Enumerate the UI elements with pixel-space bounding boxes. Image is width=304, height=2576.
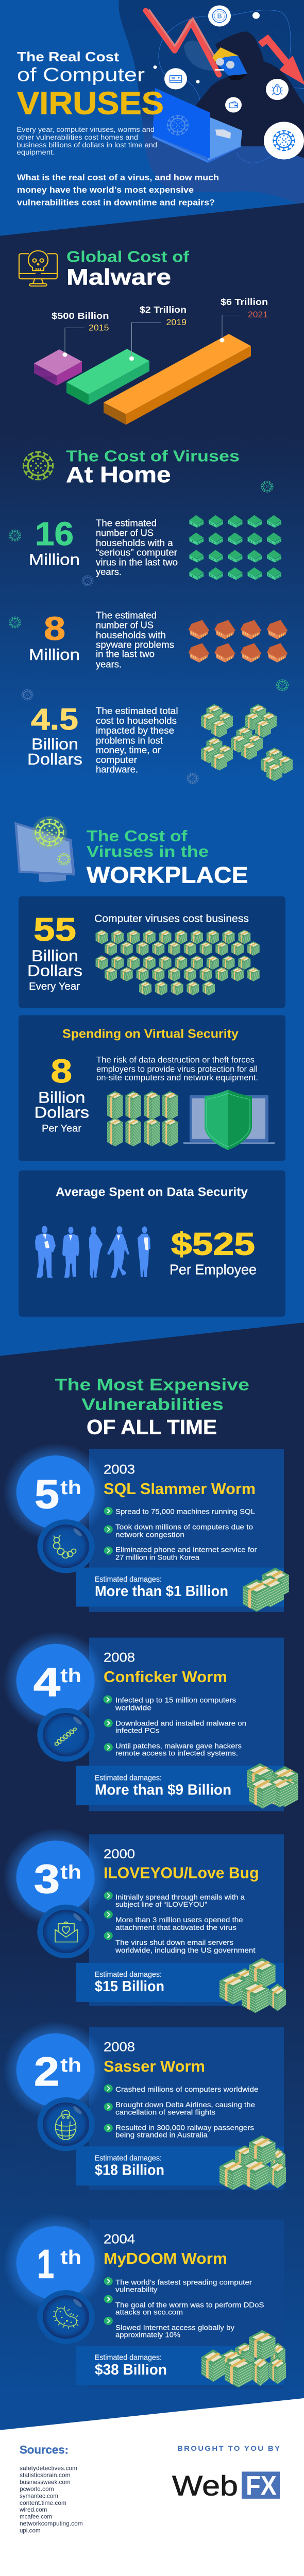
year and name bbox=[104, 2039, 205, 2075]
year and name: MyDOOM Worm bbox=[104, 2249, 227, 2267]
leader lines bbox=[65, 315, 242, 359]
rank badge: th bbox=[60, 2054, 81, 2076]
damages: Estimated damages: bbox=[95, 1970, 162, 1979]
damages band bbox=[76, 2346, 284, 2385]
title: of Computer bbox=[17, 64, 145, 86]
icon: virus badge bbox=[264, 122, 304, 160]
icon: bitcoin: B bbox=[217, 12, 222, 20]
sources list: content.time.com bbox=[20, 2499, 66, 2506]
rank badge: 3 bbox=[34, 1856, 60, 1902]
rank badge bbox=[3, 1443, 108, 1541]
damages bbox=[95, 1774, 231, 1798]
icon: green virus bbox=[24, 452, 53, 480]
year and name: 2004 bbox=[104, 2231, 135, 2247]
year and name bbox=[104, 1462, 256, 1498]
title: The Real Cost bbox=[17, 49, 119, 64]
damages bbox=[95, 2353, 167, 2378]
damages: $38 Billion bbox=[95, 2362, 167, 2378]
year and name: 2003 bbox=[104, 1462, 135, 1477]
label: 2019: $2 Trillion bbox=[140, 304, 187, 315]
damages: More than $1 Billion bbox=[95, 1583, 228, 1600]
title bbox=[17, 49, 164, 121]
text: 16 million description: years. bbox=[96, 567, 122, 578]
rank badge bbox=[3, 1828, 108, 1926]
logo: WebFX: FX bbox=[246, 2470, 277, 2501]
heading: most expensive vulnerabilities bbox=[55, 1375, 249, 1438]
sources list: networkcomputing.com bbox=[20, 2520, 83, 2527]
text: 16 million description: households with a bbox=[96, 538, 173, 549]
stat: 8 billion: Billion bbox=[38, 1088, 86, 1106]
text: 4.5 billion description: computer bbox=[96, 755, 137, 766]
bullets: 27 million in South Korea bbox=[115, 1554, 200, 1562]
text: risk description: on-site computers and network equipment. bbox=[96, 1073, 258, 1082]
bullets: attacks on sco.com bbox=[115, 2309, 183, 2316]
heading: most expensive vulnerabilities: Vulnerabilities bbox=[81, 1395, 224, 1414]
stat: 8 million: 8 bbox=[44, 610, 65, 647]
stat: 8 billion: 8 bbox=[51, 1053, 72, 1089]
hero illustration: hacker at laptop bbox=[146, 5, 304, 163]
intro question: vulnerabilities cost in downtime and repairs? bbox=[17, 197, 215, 207]
damages band bbox=[76, 2146, 284, 2185]
intro paragraph: Every year, computer viruses, worms and bbox=[16, 125, 155, 133]
label: 2021 bbox=[221, 296, 268, 319]
panel: average spent on data security bbox=[19, 1171, 285, 1317]
icon: worm bbox=[37, 1708, 95, 1761]
leader dots bbox=[63, 338, 225, 361]
stat: $525 per employee: $525 bbox=[171, 1227, 255, 1262]
sources list: safetydetectives.com bbox=[20, 2465, 77, 2471]
damages band bbox=[76, 1963, 284, 2002]
bullets: Eliminated phone and internet service for bbox=[115, 1546, 257, 1554]
stat: 16 million: 16 bbox=[35, 515, 74, 552]
stat: 55 billion: Billion bbox=[31, 946, 78, 964]
text: 16 million description: “serious” computer bbox=[96, 548, 177, 558]
decorative viruses bbox=[9, 481, 288, 784]
text: 4.5 billion description: The estimated total bbox=[96, 706, 178, 717]
sources bbox=[19, 2443, 83, 2534]
bullets: The virus shut down email servers bbox=[115, 1939, 233, 1947]
stat: 4.5 billion dollars bbox=[27, 703, 82, 768]
label: 2015: 2015 bbox=[89, 323, 109, 332]
damages bbox=[95, 1970, 164, 1995]
icon: money pile bbox=[247, 1763, 298, 1809]
bullets: Until patches, malware gave hackers bbox=[115, 1742, 242, 1750]
dark background upper bbox=[0, 203, 304, 1356]
intro paragraph: equipment. bbox=[16, 148, 55, 156]
card panel bbox=[89, 2219, 284, 2388]
rank badge: th bbox=[60, 1665, 81, 1687]
intro paragraph: business billions of dollars in lost time and bbox=[16, 141, 157, 149]
label: 2021: 2021 bbox=[248, 310, 268, 319]
card: 3rd ILOVEYOU bbox=[3, 1828, 286, 2013]
text: 8 million description: in the last two bbox=[96, 649, 155, 659]
damages band bbox=[76, 1568, 284, 1607]
stat: 8 million: Million bbox=[29, 646, 80, 664]
damages bbox=[95, 2154, 164, 2178]
stat: 8 million bbox=[29, 610, 80, 664]
title: VIRUSES bbox=[17, 85, 164, 121]
dots bbox=[154, 12, 260, 83]
text: 4.5 billion description: problems in lost bbox=[96, 736, 163, 746]
sources list: businessweek.com bbox=[20, 2479, 71, 2485]
bullets: vulnerability bbox=[115, 2286, 158, 2294]
text: 4.5 billion description bbox=[96, 706, 178, 775]
rank badge bbox=[3, 1631, 108, 1730]
bar: 2019 green bbox=[66, 349, 149, 405]
caption: Computer viruses cost business bbox=[94, 912, 249, 924]
card panel bbox=[89, 1834, 284, 2006]
bullets: Brought down Delta Airlines, causing the bbox=[115, 2102, 255, 2109]
bullets: The world’s fastest spreading computer bbox=[115, 2279, 252, 2286]
bullets: cancellation of several flights bbox=[115, 2109, 215, 2116]
heading: global cost of malware: Malware bbox=[66, 265, 171, 290]
bullets: attachment that activated the virus bbox=[115, 1924, 237, 1932]
text: 4.5 billion description: impacted by these bbox=[96, 726, 174, 736]
stat: 8 billion bbox=[34, 1053, 89, 1134]
text: 8 million description: The estimated bbox=[96, 611, 157, 621]
bullets: Took down millions of computers due to bbox=[115, 1523, 253, 1531]
stat: 8 billion: Dollars bbox=[34, 1103, 89, 1121]
sources list: upi.com bbox=[20, 2527, 41, 2534]
stat: 55 billion bbox=[27, 911, 82, 992]
label: 2015: $500 Billion bbox=[52, 311, 109, 321]
stat: 55 billion: Dollars bbox=[27, 962, 82, 979]
icon: money pile bbox=[201, 2330, 286, 2387]
sources list: statisticsbrain.com bbox=[20, 2471, 71, 2479]
sources heading: Sources: bbox=[20, 2443, 69, 2456]
bullets bbox=[103, 1696, 246, 1757]
card: 4th Conficker Worm bbox=[3, 1631, 298, 1811]
intro question bbox=[17, 172, 219, 207]
face bbox=[212, 47, 247, 80]
stat: 4.5 billion dollars: 4.5 bbox=[31, 703, 78, 736]
stat: 4.5 billion dollars: Billion bbox=[31, 735, 78, 753]
icon: infected monitor bbox=[14, 816, 75, 883]
icon: worm bbox=[37, 1519, 95, 1573]
icon: wallet bbox=[225, 97, 242, 113]
rank badge: 2 bbox=[34, 2049, 59, 2094]
stat: 16 million: Million bbox=[29, 550, 80, 568]
bullets: Slowed Internet access globally by bbox=[115, 2324, 235, 2332]
text: 16 million description: number of US bbox=[96, 528, 154, 538]
label: 2015 bbox=[52, 311, 109, 332]
label: 2021: $6 Trillion bbox=[221, 296, 268, 307]
label: 2019 bbox=[140, 304, 187, 327]
icon: credit card bbox=[164, 68, 187, 90]
bar: 2015 purple bbox=[34, 349, 82, 385]
heading: cost of viruses in the workplace: The Cost of bbox=[87, 827, 188, 845]
year and name: 2000 bbox=[104, 1846, 135, 1861]
icon: armored bug bbox=[37, 2097, 95, 2151]
icons: employee silhouettes bbox=[35, 1226, 150, 1278]
panel: spending on virtual security bbox=[19, 1015, 285, 1161]
arrow: falling chart right part bbox=[260, 39, 304, 84]
damages band bbox=[76, 1766, 284, 1805]
heading: global cost of malware: Global Cost of bbox=[66, 247, 189, 265]
year and name bbox=[104, 2231, 227, 2267]
icon: money pile bbox=[219, 1958, 286, 2013]
rank badge bbox=[3, 2214, 108, 2312]
bullets: Downloaded and installed malware on bbox=[115, 1720, 246, 1727]
text: 8 million description: number of US bbox=[96, 620, 154, 631]
heading: cost of viruses at home bbox=[66, 447, 240, 487]
sources list: mcafee.com bbox=[20, 2513, 52, 2520]
bullets: Initnially spread through emails with a bbox=[115, 1893, 245, 1902]
bullets: being stranded in Australia bbox=[115, 2131, 208, 2139]
icon: skull monitor bbox=[19, 251, 57, 286]
dark background lower bbox=[0, 1323, 304, 2430]
text: 4.5 billion description: money, time, or bbox=[96, 745, 161, 756]
card: 2nd Sasser Worm bbox=[3, 2021, 286, 2191]
text: 8 million description bbox=[96, 611, 174, 670]
icon: bacteria bbox=[37, 2290, 95, 2344]
card panel bbox=[89, 2027, 284, 2190]
bullets: More than 3 million users opened the bbox=[115, 1916, 243, 1924]
credit: brought to you by: BROUGHT TO YOU BY bbox=[177, 2445, 280, 2453]
arrow: falling chart left part bbox=[146, 10, 219, 75]
connector lines bbox=[159, 10, 304, 163]
rank badge: 4 bbox=[33, 1659, 60, 1705]
bullets: approximately 10% bbox=[115, 2331, 180, 2340]
stat: 4.5 billion dollars: Dollars bbox=[27, 750, 82, 768]
stat: $525 per employee: Per Employee bbox=[170, 1262, 257, 1278]
rank badge: th bbox=[60, 1477, 81, 1499]
heading: global cost of malware bbox=[66, 247, 189, 290]
heading: cost of viruses at home: At Home bbox=[66, 463, 171, 487]
text: risk description: The risk of data destruction or theft forces bbox=[96, 1055, 255, 1064]
icons: green houses grid bbox=[189, 515, 281, 580]
text: 8 million description: years. bbox=[96, 659, 122, 670]
white footer background bbox=[0, 2398, 304, 2576]
stat: 55 billion: Every Year bbox=[29, 980, 80, 992]
icons: 55 money stacks bbox=[96, 930, 260, 995]
bullets: The goal of the worm was to perform DDoS bbox=[115, 2301, 264, 2309]
bullets: worldwide, including the US government bbox=[115, 1946, 256, 1955]
text: 16 million description: The estimated bbox=[96, 518, 157, 529]
year and name: 2008 bbox=[104, 2039, 135, 2054]
year and name bbox=[104, 1650, 227, 1686]
icon: bitcoin bbox=[208, 5, 231, 27]
hand bbox=[215, 129, 231, 139]
rank badge: 5 bbox=[35, 1472, 59, 1517]
stat: 55 billion: 55 bbox=[33, 911, 76, 948]
stat: 8 billion: Per Year bbox=[42, 1123, 81, 1134]
sources list: symantec.com bbox=[20, 2493, 58, 2499]
card panel bbox=[89, 1638, 284, 1811]
card: 5th SQL Slammer Worm bbox=[3, 1443, 289, 1612]
bullets: remote access to infected systems. bbox=[115, 1750, 238, 1757]
heading: cost of viruses at home: The Cost of Viruses bbox=[66, 447, 240, 465]
sources list: wired.com bbox=[19, 2506, 47, 2513]
bullets bbox=[104, 1891, 256, 1955]
label: 2019: 2019 bbox=[166, 317, 187, 327]
heading: most expensive vulnerabilities: The Most Expensive bbox=[55, 1375, 249, 1394]
year and name: Sasser Worm bbox=[104, 2057, 205, 2075]
damages: Estimated damages: bbox=[95, 1575, 162, 1584]
bullets bbox=[104, 2084, 259, 2139]
sources list bbox=[19, 2465, 83, 2534]
heading: Spending on Virtual Security bbox=[62, 1027, 239, 1041]
bullets bbox=[104, 2277, 264, 2340]
icons: tall money stacks bbox=[107, 1091, 178, 1146]
damages: Estimated damages: bbox=[95, 1774, 162, 1782]
heading: most expensive vulnerabilities: OF ALL TIME bbox=[87, 1416, 217, 1438]
icon: money pile bbox=[243, 1568, 289, 1612]
text: 8 million description: households with bbox=[96, 631, 166, 641]
bar: 2021 orange bbox=[104, 334, 251, 425]
sources list: pcworld.com bbox=[20, 2485, 54, 2493]
bullets: network congestion bbox=[115, 1531, 184, 1539]
hooded figure bbox=[196, 31, 304, 158]
stat: $525 per employee bbox=[170, 1227, 257, 1278]
damages: $15 Billion bbox=[95, 1978, 164, 1995]
text: risk description bbox=[96, 1055, 258, 1082]
bullets: subject line of “ILOVEYOU” bbox=[115, 1901, 207, 1909]
stat: 16 million bbox=[29, 515, 80, 568]
icon: laptop with shield bbox=[183, 1090, 275, 1150]
text: 4.5 billion description: cost to households bbox=[96, 716, 177, 726]
year and name: ILOVEYOU/Love Bug bbox=[104, 1864, 259, 1882]
bullets: worldwide bbox=[115, 1704, 151, 1712]
damages: Estimated damages: bbox=[95, 2353, 162, 2362]
panel: 55 billion dollars bbox=[19, 896, 285, 1008]
icon: bug bbox=[266, 79, 289, 100]
intro question: money have the world’s most expensive bbox=[17, 185, 194, 195]
damages: $18 Billion bbox=[95, 2162, 164, 2178]
bullets: Spread to 75,000 machines running SQL bbox=[115, 1508, 255, 1516]
year and name: 2008 bbox=[104, 1650, 135, 1665]
intro paragraph bbox=[16, 125, 157, 156]
bullets: Resulted in 300,000 railway passengers bbox=[115, 2124, 254, 2132]
text: 16 million description: virus in the last two bbox=[96, 557, 178, 568]
bullets: Infected up to 15 million computers bbox=[115, 1697, 236, 1704]
rank badge bbox=[3, 2021, 108, 2120]
damages: More than $9 Billion bbox=[95, 1782, 231, 1798]
card: 1st MyDOOM Worm bbox=[3, 2214, 286, 2388]
icons: orange houses grid bbox=[189, 620, 288, 663]
rank badge: th bbox=[60, 2246, 81, 2268]
damages bbox=[95, 1575, 228, 1600]
icons: money groups bbox=[201, 704, 293, 781]
smoke bbox=[184, 40, 216, 71]
bullets: infected PCs bbox=[115, 1727, 159, 1735]
card panel bbox=[89, 1449, 284, 1612]
icon: money pile bbox=[219, 2136, 286, 2191]
bullets: Crashed millions of computers worldwide bbox=[115, 2086, 259, 2094]
logo: WebFX: Web bbox=[172, 2470, 238, 2501]
damages: Estimated damages: bbox=[95, 2154, 162, 2162]
text: 8 million description: spyware problems bbox=[96, 640, 174, 651]
bullets bbox=[104, 1507, 257, 1562]
intro question: What is the real cost of a virus, and how much bbox=[17, 172, 219, 182]
text: 4.5 billion description: hardware. bbox=[96, 765, 138, 775]
rank badge: th bbox=[60, 1861, 81, 1883]
heading: cost of viruses in the workplace bbox=[87, 827, 248, 888]
chart: malware cost bars bbox=[34, 296, 268, 425]
heading: Average Spent on Data Security bbox=[56, 1185, 248, 1199]
rank badge: 1 bbox=[37, 2242, 54, 2287]
heading: cost of viruses in the workplace: WORKPLACE bbox=[87, 862, 248, 888]
text: risk description: employers to provide virus protection for all bbox=[96, 1064, 258, 1074]
icon: love letter bbox=[37, 1905, 95, 1958]
year and name: SQL Slammer Worm bbox=[104, 1480, 256, 1498]
heading: cost of viruses in the workplace: Viruses in the bbox=[87, 842, 209, 860]
year and name bbox=[104, 1846, 259, 1882]
intro paragraph: other vulnerabilities cost homes and bbox=[16, 133, 138, 141]
year and name: Conficker Worm bbox=[104, 1668, 227, 1686]
text: 16 million description bbox=[96, 518, 178, 578]
laptop bbox=[153, 88, 242, 163]
logo: WebFX bbox=[172, 2470, 280, 2501]
